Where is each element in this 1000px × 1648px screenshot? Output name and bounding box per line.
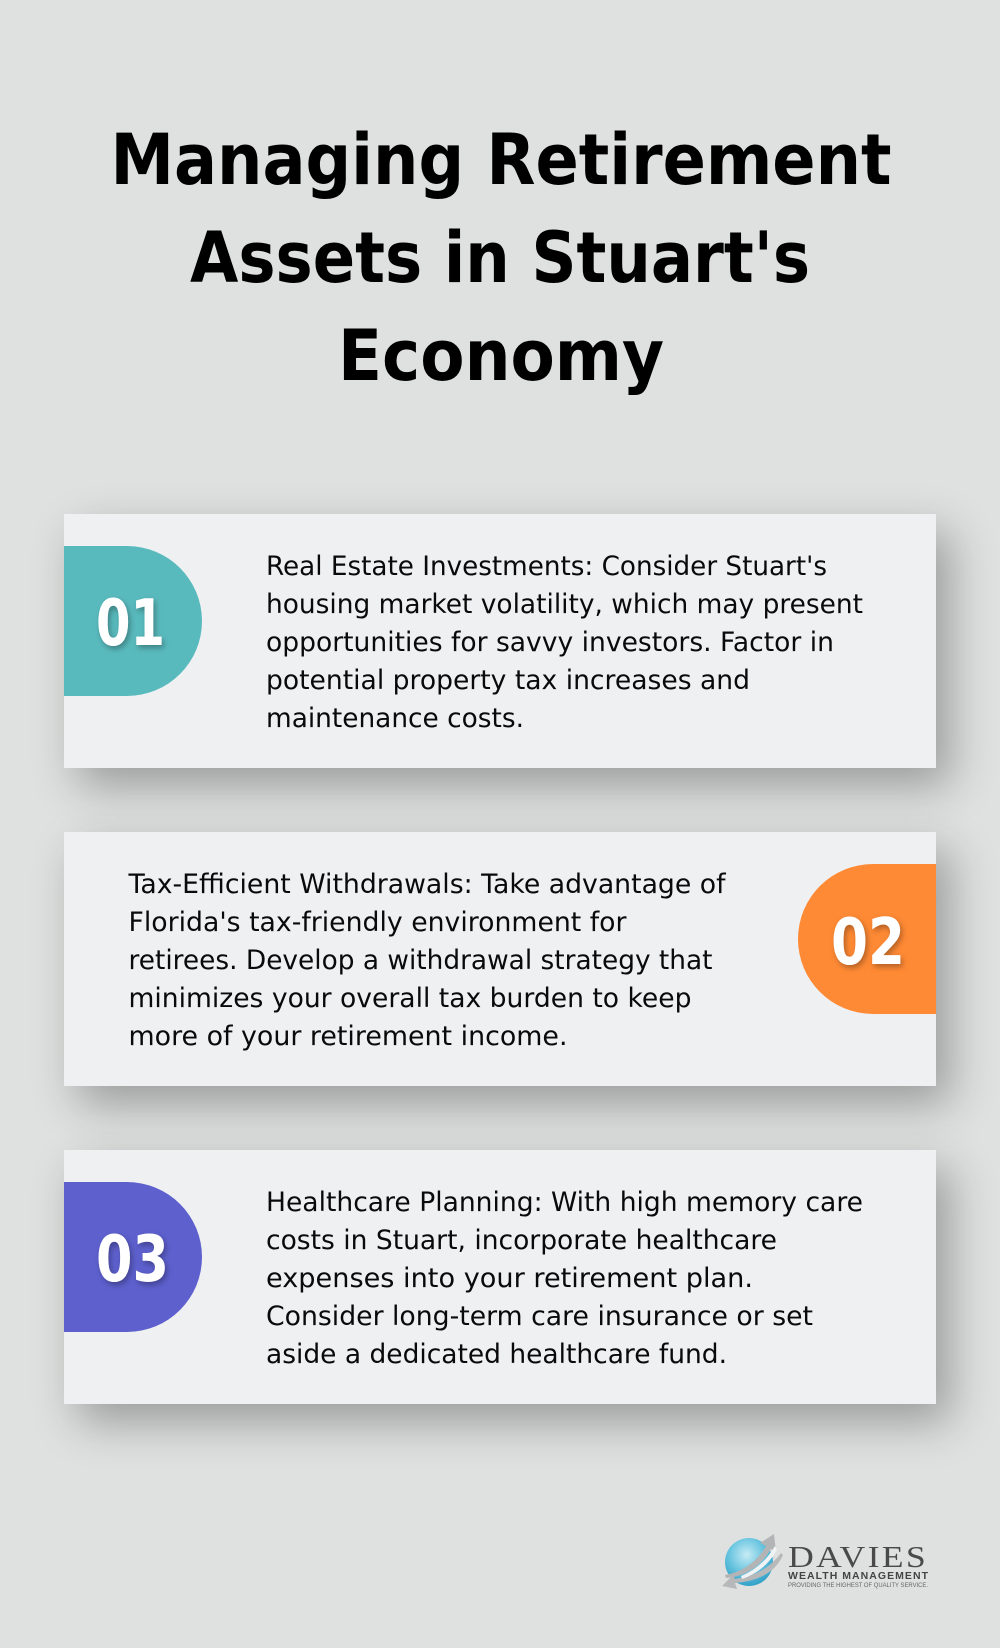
text block: healthcare planning: Healthcare Planning: With high memory care xyxy=(266,1187,863,1218)
icon: globe with arrows xyxy=(722,1534,783,1589)
number badge 01: 01 xyxy=(96,587,165,661)
title: Economy xyxy=(338,315,664,397)
title: Managing Retirement xyxy=(110,119,892,201)
panel: card 01 real estate investments xyxy=(64,514,936,768)
text block: healthcare planning: costs in Stuart, incorporate healthcare xyxy=(266,1225,777,1256)
text block: healthcare planning: expenses into your retirement plan. xyxy=(266,1263,753,1294)
number badge 02 xyxy=(798,864,936,1014)
panel: card 03 healthcare planning xyxy=(64,1150,936,1404)
text block: real estate investments xyxy=(266,551,863,734)
text block: real estate investments: Real Estate Investments: Consider Stuart's xyxy=(266,551,827,582)
number badge 03: 03 xyxy=(96,1223,169,1297)
text block: real estate investments: maintenance costs. xyxy=(266,703,524,734)
text block: tax-efficient withdrawals: retirees. Develop a withdrawal strategy that xyxy=(128,945,712,976)
title: Assets in Stuart's xyxy=(190,217,810,299)
text block: real estate investments: opportunities for savvy investors. Factor in xyxy=(266,627,834,658)
text block: tax-efficient withdrawals: minimizes your overall tax burden to keep xyxy=(128,983,692,1014)
text block: real estate investments: housing market volatility, which may present xyxy=(266,589,863,620)
panel: card 02 tax-efficient withdrawals xyxy=(64,832,936,1086)
text block: healthcare planning: Consider long-term care insurance or set xyxy=(266,1301,813,1332)
text block: healthcare planning: aside a dedicated healthcare fund. xyxy=(266,1339,727,1370)
text block: tax-efficient withdrawals: Florida's tax-friendly environment for xyxy=(128,907,627,938)
title xyxy=(110,119,892,397)
logo wordmark: WEALTH MANAGEMENT xyxy=(788,1570,929,1582)
logo wordmark: DAVIES xyxy=(788,1539,928,1574)
text block: tax-efficient withdrawals: more of your retirement income. xyxy=(128,1021,568,1052)
text block: real estate investments: potential property tax increases and xyxy=(266,665,750,696)
text block: tax-efficient withdrawals: Tax-Efficient Withdrawals: Take advantage of xyxy=(128,869,727,900)
text block: tax-efficient withdrawals xyxy=(128,869,727,1052)
text block: healthcare planning xyxy=(266,1187,863,1370)
number badge 02: 02 xyxy=(831,906,905,980)
number badge 03 xyxy=(64,1182,202,1332)
logo wordmark: PROVIDING THE HIGHEST OF QUALITY SERVICE. xyxy=(788,1583,928,1589)
logo wordmark xyxy=(788,1539,929,1589)
number badge 01 xyxy=(64,546,202,696)
